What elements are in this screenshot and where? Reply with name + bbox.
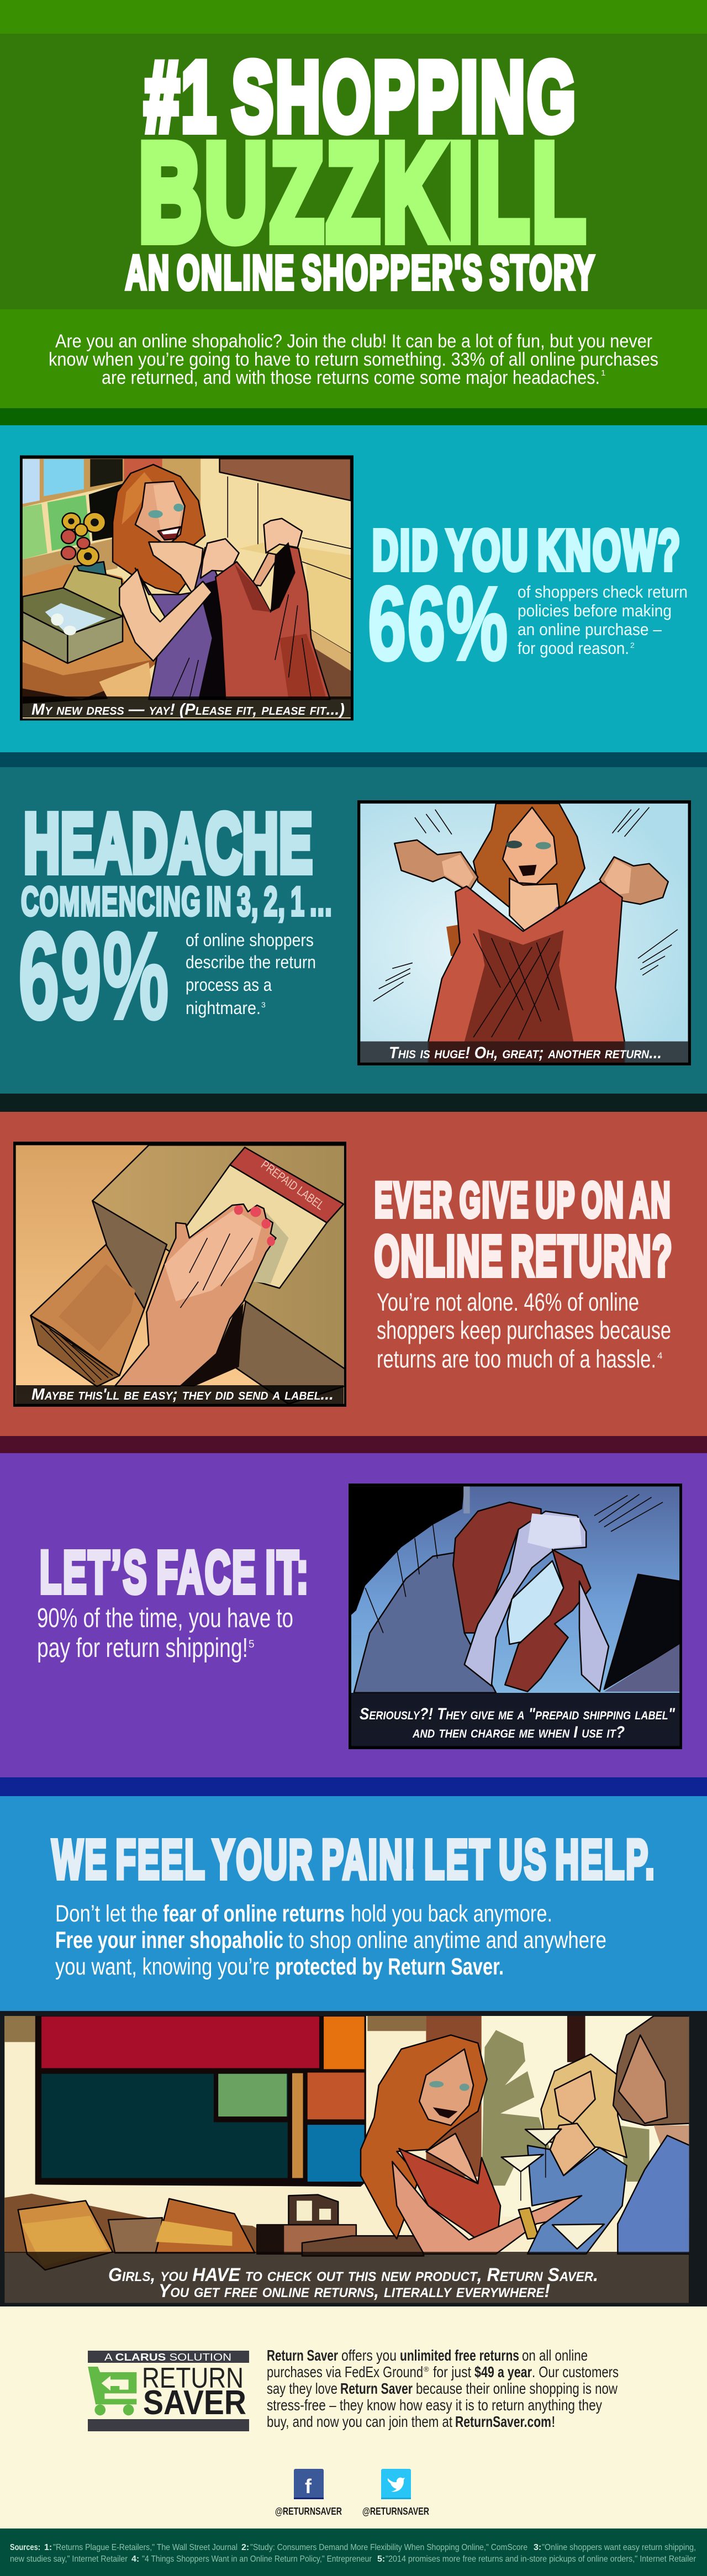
handle labels: @RETURNSAVER [275, 2506, 342, 2517]
icon: shopping cart [88, 2367, 136, 2415]
handle labels: @RETURNSAVER [362, 2506, 429, 2517]
product description: because their online shopping is now [416, 2380, 618, 2397]
panel: sources [0, 2529, 707, 2576]
handle labels [275, 2506, 429, 2517]
heading: let's face it: LET’S FACE IT: [40, 1539, 308, 1606]
panel: sources: "Returns Plague E-Retailers," The Wall Street Journal [53, 2543, 238, 2552]
caption: This is huge! Oh, great; another return... [389, 1044, 662, 1062]
product description: $49 a year [474, 2363, 532, 2380]
icon: twitter [381, 2469, 411, 2499]
body text: Free your inner shopaholic [55, 1927, 283, 1954]
stat description: describe the return [186, 952, 316, 972]
stat description: 3 [261, 1000, 266, 1009]
product description: unlimited free returns [400, 2347, 519, 2364]
comic panel: woman with head in hands at laptop [349, 1484, 682, 1749]
body text: protected by Return Saver. [275, 1954, 504, 1980]
product description: offers you [341, 2347, 397, 2364]
panel: sources: "Study: Consumers Demand More Flexibility When Shopping Online," ComScore [250, 2543, 527, 2552]
logo: return saver: SAVER [143, 2384, 246, 2422]
caption: My new dress — yay! (Please fit, please fit...) [31, 701, 345, 719]
heading: did you know: DID YOU KNOW? [372, 519, 680, 582]
heading: commencing: COMMENCING IN 3, 2, 1 ... [21, 879, 332, 924]
product description: say they love [267, 2380, 337, 2397]
product description: buy, and now you can join them at [267, 2413, 452, 2430]
product description: stress-free – they know how easy it is to return anything they [267, 2396, 602, 2414]
prepaid label text: PREPAID LABEL [258, 1158, 327, 1212]
body text: pay for return shipping! [37, 1633, 248, 1663]
panel: sources: 5: [377, 2554, 385, 2564]
product description: ReturnSaver.com [455, 2413, 551, 2430]
stat description: an online purchase – [518, 620, 662, 639]
panel: sources: new studies say," Internet Retailer [10, 2554, 128, 2564]
comic panel: friends with martinis: You get free online returns, literally everywhere! [159, 2281, 550, 2301]
heading: #1 shopping: #1 SHOPPING [145, 43, 575, 151]
panel: did you know [0, 425, 707, 767]
body text: 5 [249, 1639, 255, 1650]
body text [377, 1288, 671, 1373]
panel: ever give up [0, 1112, 707, 1453]
panel: headache [0, 767, 707, 1112]
stat description: of shoppers check return [518, 582, 688, 601]
product description: Return Saver [267, 2347, 338, 2364]
stat description: of online shoppers [186, 930, 314, 950]
stat: 66%: 66% [368, 565, 508, 682]
stat description: nightmare. [186, 998, 261, 1018]
stat description [518, 582, 688, 658]
caption: Maybe this'll be easy; they did send a label... [31, 1386, 334, 1403]
comic panel: woman with head in hands at laptop: and then charge me when I use it? [412, 1723, 625, 1741]
comic panel: woman with huge dress [357, 800, 691, 1065]
product description [267, 2347, 619, 2430]
comic panel: friends with martinis [0, 2011, 707, 2306]
stat description [186, 930, 316, 1018]
body text: you want, knowing you’re [55, 1954, 270, 1980]
icon: facebook [294, 2469, 324, 2499]
panel: sources: 4: [131, 2554, 139, 2564]
body text: 90% of the time, you have to [37, 1603, 293, 1633]
body text: 4 [657, 1350, 662, 1361]
stat description: 2 [630, 641, 635, 650]
product description: on all online [522, 2347, 588, 2364]
comic panel: hand on prepaid label [13, 1142, 346, 1407]
product description: Return Saver [340, 2380, 413, 2397]
panel: ever give up: ONLINE RETURN? [374, 1224, 672, 1288]
caption: Girls, you HAVE to check out this new product, Return Saver. [108, 2264, 598, 2285]
intro text: know when you’re going to have to return something. 33% of all online purchases [49, 349, 658, 370]
product description: for just [433, 2363, 471, 2380]
comic panel: woman with new dress [20, 455, 354, 720]
stat description: policies before making [518, 601, 672, 620]
panel: sources: "4 Things Shoppers Want in an Online Return Policy," Entrepreneur [142, 2554, 372, 2564]
heading: ever give up on an online return: EVER GIVE UP ON AN [374, 1173, 671, 1228]
panel: we feel your pain [0, 1796, 707, 2011]
intro text: are returned, and with those returns come some major headaches. [102, 367, 600, 388]
logo: return saver: RETURN [142, 2362, 244, 2394]
panel: let's face it [0, 1453, 707, 1796]
product description: . Our customers [532, 2363, 619, 2380]
product description: ! [551, 2413, 556, 2430]
panel: title header [0, 0, 707, 425]
panel: return saver footer [0, 2306, 707, 2529]
stat: 69%: 69% [18, 907, 168, 1046]
body text: Don’t let the [55, 1901, 158, 1927]
logo: return saver [88, 2351, 249, 2431]
logo: return saver: A CLARUS SOLUTION [104, 2352, 231, 2363]
body text: to shop online anytime and anywhere [288, 1927, 606, 1954]
body text: hold you back anymore. [351, 1901, 552, 1927]
panel: sources: 3: [534, 2543, 541, 2552]
product description: ® [424, 2365, 429, 2373]
body text [55, 1901, 606, 1980]
intro text: 1 [601, 368, 605, 378]
intro text: Are you an online shopaholic? Join the club! It can be a lot of fun, but you never [55, 331, 652, 352]
body text [37, 1603, 293, 1663]
body text: fear of online returns [163, 1901, 345, 1927]
heading: we feel your pain: WE FEEL YOUR PAIN! LET US HELP. [52, 1829, 655, 1891]
heading: buzzkill: BUZZKILL [139, 117, 585, 268]
panel: sources: Sources: [10, 2543, 40, 2552]
icon: facebook: f [305, 2475, 312, 2498]
stat description: process as a [186, 975, 272, 995]
heading: headache: HEADACHE [24, 797, 313, 890]
panel: sources: 2: [241, 2543, 249, 2552]
heading: an online shopper's story: AN ONLINE SHOPPER'S STORY [125, 246, 594, 300]
intro text [49, 331, 658, 388]
product description: purchases via FedEx Ground [267, 2363, 423, 2380]
panel: sources: 1: [44, 2543, 52, 2552]
stat description: for good reason. [518, 638, 629, 658]
